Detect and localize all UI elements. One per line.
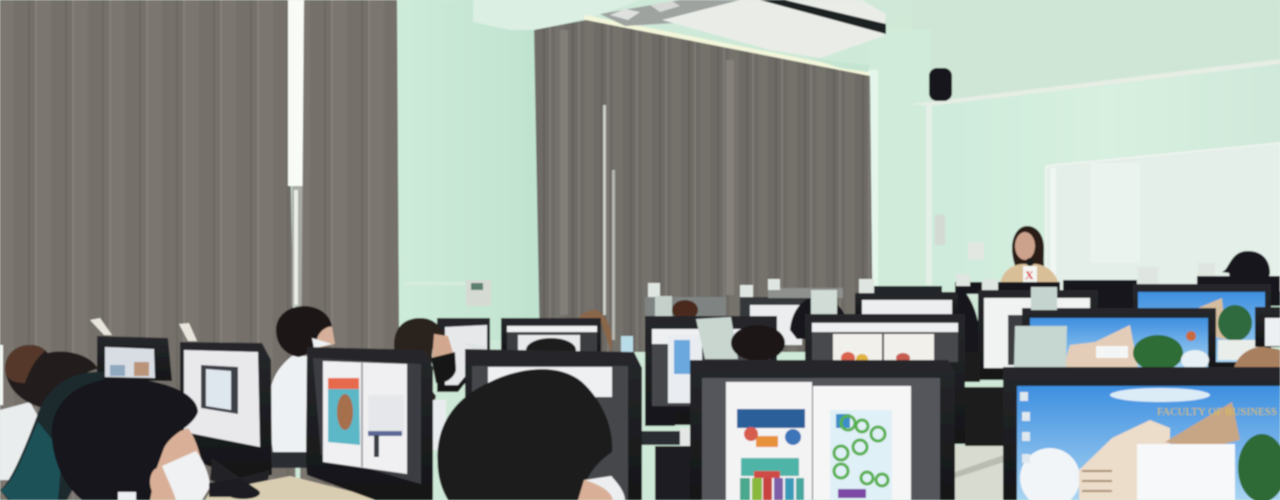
monitor: far right edge: [1255, 307, 1280, 347]
monitor: mid right with campus wallpaper: [1022, 308, 1216, 371]
monitor: centre-left with infographic pages: [306, 347, 433, 500]
monitor: right centre with illustrated pages: [805, 314, 965, 444]
student seated in middle left with white shirt: [269, 306, 335, 468]
front-left student with white mask: [52, 378, 210, 500]
monitor: back centre right: [855, 293, 958, 318]
monitor: front centre-right with infographic: [690, 360, 955, 500]
student with teal-dyed hair: [0, 372, 105, 500]
left curtain: [0, 0, 296, 500]
keyboard and chair near centre: [642, 428, 692, 500]
student in black face mask: [394, 318, 487, 450]
monitor: front-left rear row small: [90, 318, 197, 381]
seated person at back right: [1222, 251, 1270, 285]
seated person behind middle monitors: [577, 292, 981, 352]
monitor: back centre: [501, 318, 633, 362]
infographic page: flowchart and bottles: [737, 409, 805, 500]
monitor: centre right with blue page: [645, 316, 785, 426]
wall thermostats: [466, 215, 984, 306]
monitor: left with page on screen: [180, 342, 272, 490]
second curtain: [300, 0, 400, 500]
monitor: rear right with campus wallpaper: [1133, 284, 1280, 368]
back-row dark monitors: [645, 276, 1280, 345]
presenter with microphone: X: [1025, 268, 1034, 282]
monitor: centre with student in front: [465, 349, 642, 500]
small paper name cards: [648, 263, 1215, 297]
grey paper name cards: [655, 287, 1067, 368]
bright window strip: [0, 0, 308, 405]
presenter with microphone: [999, 226, 1060, 290]
desk and chair between front monitors: [955, 352, 1005, 500]
ceiling bulkhead and air conditioner: [473, 0, 886, 76]
whiteboard: [1046, 143, 1280, 290]
centre curtain: [534, 20, 873, 352]
desk surface left: [205, 476, 385, 500]
front-left student with hair tie: [0, 345, 98, 480]
monitor: white screen rear right: [978, 290, 1098, 380]
front-centre student seen from behind: [437, 369, 625, 500]
monitor: far back left: [437, 318, 490, 392]
infographic page: green process path: [830, 410, 892, 500]
wall speaker: [929, 68, 952, 101]
keyboard and mouse on left desk: [209, 478, 260, 499]
monitor: front right with faculty wallpaper: [1003, 367, 1280, 500]
